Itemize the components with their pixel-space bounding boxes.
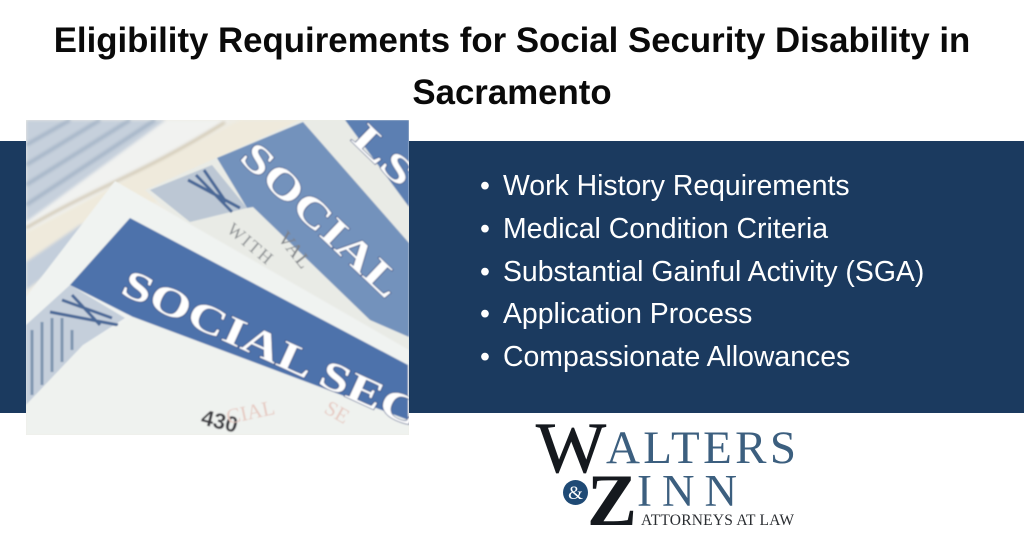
- title: Eligibility Requirements for Social Security Disability in: [54, 21, 970, 60]
- bullet list: Medical Condition Criteria: [503, 213, 828, 245]
- logo wordmark: [536, 420, 796, 530]
- photo: social security cards: VAL: [273, 228, 316, 274]
- bullet list: •: [480, 298, 490, 330]
- photo: social security cards: 430: [199, 405, 240, 438]
- back card, top left: [26, 120, 238, 290]
- middle card: [147, 120, 408, 336]
- bullet list: Application Process: [503, 298, 752, 330]
- logo wordmark: ALTERS: [606, 422, 796, 474]
- bullet list: •: [480, 213, 490, 245]
- bullet list: •: [480, 341, 490, 373]
- bullet list: •: [480, 256, 490, 288]
- card lettering: SOCIAL SEC: [115, 260, 427, 435]
- top right card: [345, 120, 409, 207]
- front card: [26, 181, 409, 435]
- bullet list: •: [480, 170, 490, 202]
- logo: Walters & Zinn: [536, 420, 796, 530]
- logo wordmark: &: [568, 483, 583, 504]
- logo wordmark: INN: [637, 466, 737, 516]
- photo: social security cards: SOCIAL: [232, 133, 411, 307]
- photo: social security cards: LS: [344, 116, 423, 195]
- photo: social security cards: CIAL: [224, 395, 277, 429]
- title: Sacramento: [412, 73, 612, 112]
- bullet list: Work History Requirements: [503, 170, 850, 202]
- logo wordmark: ATTORNEYS AT LAW: [641, 512, 794, 529]
- title: [54, 21, 970, 112]
- photo: social security cards: WITH: [223, 219, 278, 269]
- navy band: [0, 141, 1024, 413]
- bullet list: Substantial Gainful Activity (SGA): [503, 256, 924, 288]
- bullet list: [480, 170, 924, 373]
- bullet list: Compassionate Allowances: [503, 341, 850, 373]
- photo: social security cards: SE: [320, 396, 354, 429]
- photo: social security cards: [26, 120, 409, 435]
